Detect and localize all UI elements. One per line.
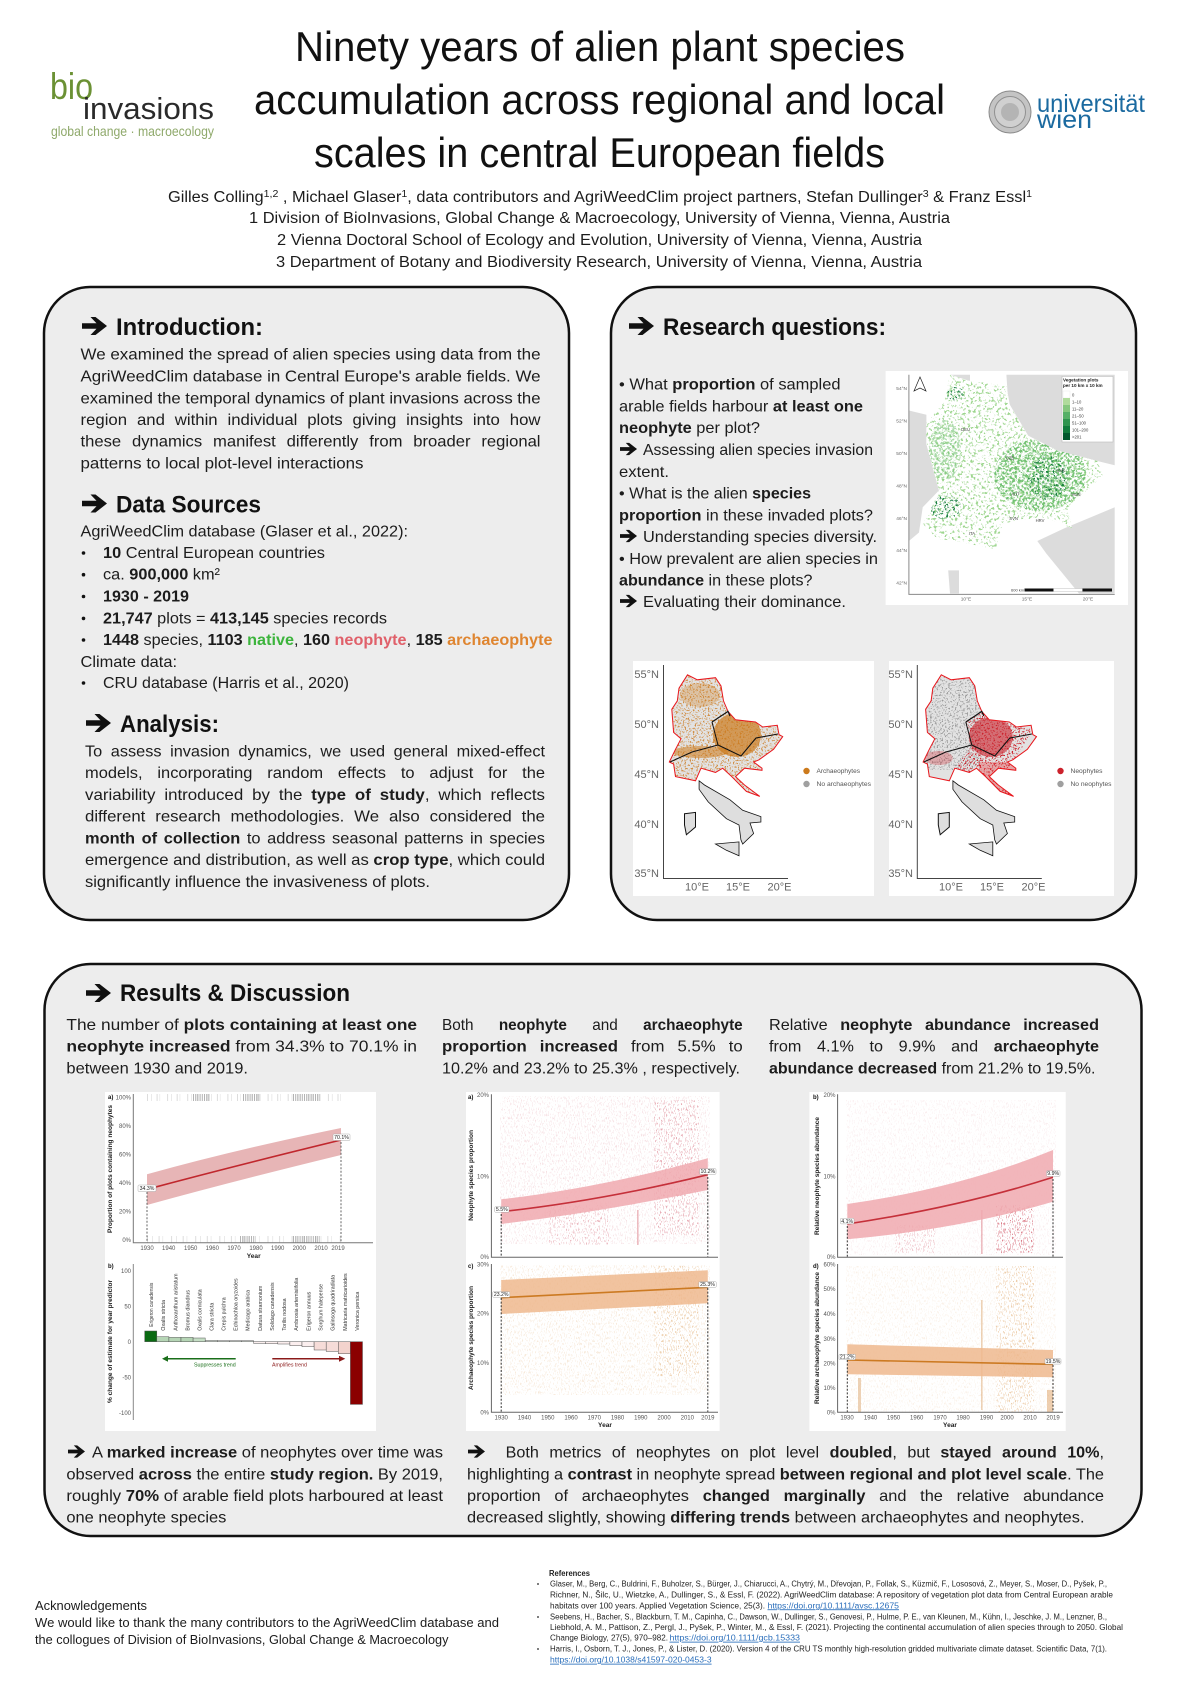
text: data sources list: 1448 species, 1103 native, 160 neophyte, 185 archaeophyte	[103, 632, 553, 649]
chart: proportion of plots containing neophytes and species effect: 50	[124, 1304, 132, 1310]
species names: Oxalis stricta	[161, 1299, 167, 1331]
logo: universitat wien: wien	[1036, 106, 1092, 134]
chart: relative neophyte and archaeophyte abundance: 1990	[980, 1416, 994, 1422]
authors and affiliations: 3 Department of Botany and Biodiversity Research, University of Vienna, Vienna, Austria	[276, 254, 922, 271]
text: analysis body: To assess invasion dynamics, we used general mixed-effect	[85, 743, 546, 760]
map legend: 51–100	[1072, 420, 1087, 426]
legend: archaeophytes: Archaeophytes	[816, 768, 860, 775]
species names: Veronica persica	[355, 1291, 361, 1331]
chart: proportion of plots containing neophytes and species effect: 1990	[271, 1246, 285, 1252]
chart: proportion of plots containing neophytes and species effect: b)	[108, 1264, 114, 1270]
chart: neophyte and archaeophyte species proportion: 10.2%	[700, 1169, 716, 1175]
chart: neophyte and archaeophyte species proportion: 23.2%	[494, 1292, 509, 1298]
chart: relative neophyte and archaeophyte abundance: 2010	[1023, 1416, 1037, 1422]
text: research questions list	[619, 377, 878, 611]
legend: archaeophytes: No archaeophytes	[816, 781, 871, 788]
scatter a	[500, 1096, 710, 1245]
chart: neophyte and archaeophyte species proportion: Neophyte species proportion	[468, 1130, 475, 1221]
chart: neophyte and archaeophyte species proportion: c)	[468, 1264, 473, 1270]
authors and affiliations: , data contributors and AgriWeedClim project partners, Stefan Dullinger	[407, 189, 923, 206]
map: archaeophytes: 55°N	[634, 669, 659, 681]
chart: neophyte and archaeophyte species proportion: 1950	[541, 1416, 555, 1422]
text: research questions list: • How prevalent are alien species in	[619, 551, 878, 568]
species names: Oxalis corniculata	[197, 1289, 203, 1331]
text: analysis body	[85, 743, 546, 891]
chart: relative neophyte and archaeophyte abundance: 10%	[823, 1174, 836, 1180]
map: neophytes	[888, 661, 1114, 896]
map: neophytes: 40°N	[888, 819, 913, 831]
map: neophytes: 15°E	[980, 882, 1004, 894]
legend: neophytes: No neophytes	[1070, 781, 1112, 788]
logo: bioinvasions: invasions	[83, 91, 214, 126]
authors and affiliations: 1	[1026, 189, 1032, 200]
text: discussion of plot level metrics: decreased slightly, showing differing trends between archaeophytes and neophytes.	[467, 1510, 1084, 1527]
map legend: 21–50	[1072, 414, 1084, 418]
chart: neophyte and archaeophyte species proportion: 20%	[477, 1312, 490, 1318]
text: analysis body: month of collection to address seasonal patterns in species	[85, 830, 545, 848]
authors and affiliations: 1,2	[264, 189, 279, 200]
chart: relative neophyte and archaeophyte abundance: 40%	[823, 1312, 836, 1318]
text: analysis body: variability introduced by the type of study , which reflects	[85, 787, 545, 804]
map: vegetation plots per grid cell: 54°N	[896, 386, 908, 392]
confidence band	[147, 1128, 341, 1205]
acknowledgements: We would like to thank the many contributors to the AgriWeedClim database and	[35, 1615, 499, 1630]
chart: relative neophyte and archaeophyte abundance: 0%	[827, 1255, 836, 1261]
map: neophytes: 35°N	[888, 868, 913, 880]
title: scales in central European fields	[314, 129, 885, 176]
references: References	[549, 1568, 590, 1578]
chart: proportion of plots containing neophytes and species effect: 40%	[119, 1181, 132, 1187]
text: data sources list: Climate data:	[80, 654, 177, 671]
chart: proportion of plots containing neophytes and species effect: Proportion of plots containing neophytes	[107, 1105, 114, 1233]
chart: relative neophyte and archaeophyte abundance: Relative archaeophyte species abundance	[814, 1272, 821, 1404]
chart: relative neophyte and archaeophyte abundance: 1940	[864, 1416, 878, 1422]
chart: proportion of plots containing neophytes and species effect: % change of estimate for year predictor	[107, 1280, 114, 1403]
map legend: >201	[1072, 434, 1082, 440]
chart: relative neophyte and archaeophyte abundance: 4.1%	[841, 1219, 853, 1225]
map: vegetation plots per grid cell: SVK	[1057, 468, 1065, 473]
text: research questions list: • What is the alien species	[619, 486, 811, 503]
chart: proportion of plots containing neophytes and species effect: 100%	[116, 1096, 132, 1102]
map: vegetation plots per grid cell: HUN	[1071, 492, 1081, 497]
chart: proportion of plots containing neophytes and species effect: 1940	[162, 1246, 176, 1252]
chart: proportion of plots containing neophytes and species effect: 1970	[227, 1246, 241, 1252]
text: introduction body: patterns to local plot-level interactions	[80, 456, 364, 472]
chart: neophyte and archaeophyte species proportion: 1970	[588, 1416, 602, 1422]
heading: analysis: Analysis:	[120, 711, 219, 738]
map legend: 0	[1072, 392, 1075, 398]
chart: proportion of plots containing neophytes and species effect: -50	[122, 1376, 132, 1382]
authors and affiliations: , Michael Glaser	[278, 189, 401, 206]
text: data sources list: ca. 900,000 km²	[103, 567, 221, 584]
map: neophytes: 10°E	[939, 882, 963, 894]
map: archaeophytes: 35°N	[634, 868, 659, 880]
chart: neophyte and archaeophyte species proportion: 1980	[611, 1416, 625, 1422]
map: neophytes: 50°N	[888, 719, 913, 731]
heading: results and discussion: Results & Discussion	[120, 980, 350, 1007]
references: Harris, I., Osborn, T. J., Jones, P., & Lister, D. (2020). Version 4 of the CRU TS monthly high-resolution gridded multivariate climate dataset. Scientific Data, 7(1).	[550, 1644, 1107, 1654]
legend: archaeophytes	[803, 768, 871, 788]
chart: relative neophyte and archaeophyte abundance: 20%	[823, 1093, 836, 1099]
title	[254, 23, 945, 176]
authors and affiliations: 3	[923, 189, 929, 200]
map legend: 101–200	[1072, 428, 1089, 432]
map legend	[1062, 376, 1113, 442]
logo: universitat wien: universität	[1037, 90, 1145, 118]
text: finding 1: The number of plots containing at least one	[66, 1017, 417, 1034]
chart: relative neophyte and archaeophyte abundance: 9.9%	[1047, 1171, 1059, 1177]
map legend: 11–20	[1072, 406, 1084, 412]
map: vegetation plots per grid cell: 10°E	[961, 596, 971, 602]
species names: Clara stricta	[210, 1302, 216, 1331]
chart: relative neophyte and archaeophyte abundance: 21.2%	[840, 1355, 855, 1361]
acknowledgements	[35, 1598, 499, 1647]
references	[537, 1568, 1123, 1665]
chart: neophyte and archaeophyte species proportion: 2019	[701, 1416, 715, 1422]
text: analysis body: emergence and distribution, as well as crop type, which could	[85, 852, 545, 869]
map: vegetation plots per grid cell: 52°N	[896, 418, 908, 424]
species effect bars	[145, 1331, 362, 1404]
chart: neophyte and archaeophyte species proportion: 10%	[477, 1361, 490, 1367]
species names: Erigeron annuus	[306, 1292, 312, 1331]
chart: neophyte and archaeophyte species proportion: 1990	[634, 1416, 648, 1422]
references: Liebhold, A. M., Pattison, Z., Pergl, J., Pyšek, P., Winter, M., & Essl, F. (2021). Projecting the continental accumulation of alien species through to 2050. Global	[550, 1622, 1123, 1632]
chart: relative neophyte and archaeophyte abundance: 2000	[1000, 1416, 1014, 1422]
species names: Echinochloa oryzoides	[234, 1278, 240, 1331]
authors and affiliations: & Franz Essl	[929, 189, 1026, 206]
chart: proportion of plots containing neophytes and species effect: 20%	[119, 1210, 132, 1216]
chart: neophyte and archaeophyte species proportion: 0%	[480, 1410, 490, 1416]
map: vegetation plots per grid cell: AUT	[1011, 492, 1020, 496]
chart: neophyte and archaeophyte species proportion: 10%	[477, 1174, 490, 1180]
chart: proportion of plots containing neophytes and species effect: 1960	[206, 1246, 220, 1252]
logo: bioinvasions: global change · macroecology	[51, 123, 214, 139]
species names: Crepis pulchra	[221, 1297, 227, 1331]
chart: relative neophyte and archaeophyte abundance: Relative neophyte species abundance	[814, 1117, 821, 1235]
map: archaeophytes: 40°N	[634, 819, 659, 831]
chart: relative neophyte and archaeophyte abundance: d)	[813, 1264, 819, 1270]
chart: neophyte and archaeophyte species proportion: 30%	[477, 1262, 490, 1268]
chart: proportion of plots containing neophytes and species effect: -100	[119, 1411, 132, 1417]
chart: neophyte and archaeophyte species proportion: 2010	[681, 1416, 695, 1422]
map legend: per 10 km x 10 km	[1063, 383, 1103, 388]
chart: neophyte and archaeophyte species proportion	[466, 1092, 720, 1431]
map: vegetation plots per grid cell: 15°E	[1022, 596, 1032, 602]
text: finding 1: between 1930 and 2019.	[66, 1060, 248, 1077]
text: research questions list: extent.	[619, 464, 669, 481]
chart: proportion of plots containing neophytes and species effect: 2000	[293, 1246, 307, 1252]
map: vegetation plots per grid cell: CZE	[1006, 456, 1014, 460]
references: Seebens, H., Bacher, S., Blackburn, T. M., Capinha, C., Dawson, W., Dullinger, S., Genovesi, P., Hulme, P. E., van Kleunen, M., Kühn, I., Jeschke, J. M., Lenzner, B.,	[550, 1611, 1107, 1621]
map: archaeophytes: 45°N	[634, 769, 659, 781]
chart: neophyte and archaeophyte species proportion: 25.3%	[700, 1282, 715, 1288]
chart: proportion of plots containing neophytes and species effect: 0	[128, 1340, 132, 1346]
title: Ninety years of alien plant species	[295, 23, 905, 70]
text: data sources list	[80, 523, 553, 692]
map legend: Vegetation plots	[1063, 378, 1099, 382]
chart: proportion of plots containing neophytes and species effect	[105, 1092, 376, 1431]
text: introduction body: AgriWeedClim database in Central Europe's arable fields. We	[80, 368, 541, 386]
chart: relative neophyte and archaeophyte abundance: 30%	[823, 1337, 836, 1343]
authors and affiliations	[168, 189, 1032, 271]
references: Richner, N., Šilc, U., Wietzke, A., Dullinger, S., & Essl, F. (2022). AgriWeedClim database: A repository of vegetation plot data from Central European arable	[550, 1590, 1113, 1600]
text: research questions list: arable fields harbour at least one	[619, 398, 863, 415]
map: archaeophytes: 50°N	[634, 719, 659, 731]
arrow: suppresses trend	[162, 1356, 236, 1368]
chart: relative neophyte and archaeophyte abundance: 0%	[827, 1410, 836, 1416]
species names: Medicago arabica	[246, 1289, 252, 1331]
north arrow	[914, 377, 926, 391]
legend: neophytes	[1057, 768, 1112, 788]
text: research questions list: proportion in these invaded plots?	[619, 507, 873, 524]
references: https://doi.org/10.1111/gcb.15333	[670, 1633, 800, 1643]
authors and affiliations: 2 Vienna Doctoral School of Ecology and Evolution, University of Vienna, Vienna, Austria	[277, 232, 922, 249]
arrow: amplifies trend	[272, 1356, 345, 1368]
scale bar: 600 km	[1011, 588, 1025, 592]
text: analysis body: significantly influence the invasiveness of plots.	[85, 874, 430, 891]
scale bar	[1011, 588, 1112, 592]
text: finding 1	[66, 1017, 417, 1077]
map: vegetation plots per grid cell: 44°N	[896, 548, 908, 554]
text: finding 2: proportion increased from 5.5% to	[442, 1039, 743, 1056]
map: vegetation plots per grid cell: 50°N	[896, 451, 908, 457]
heading: research questions: Research questions:	[663, 314, 886, 341]
map: archaeophytes: 15°E	[726, 882, 750, 894]
chart: neophyte and archaeophyte species proportion: a)	[468, 1095, 473, 1101]
chart: proportion of plots containing neophytes and species effect: 1980	[249, 1246, 263, 1252]
species names: Datura stramonium	[258, 1286, 264, 1331]
map: vegetation plots per grid cell: 20°E	[1083, 596, 1093, 602]
trend line	[147, 1140, 341, 1189]
text: finding 2	[442, 1017, 743, 1077]
value labels: 70.1%	[334, 1135, 349, 1141]
value labels: 34.3%	[140, 1186, 155, 1192]
chart: proportion of plots containing neophytes and species effect: 80%	[119, 1124, 132, 1130]
chart: neophyte and archaeophyte species proportion: 20%	[477, 1093, 490, 1099]
text: discussion of plot level metrics: highlighting a contrast in neophyte spread between regional and plot level scale . The	[467, 1466, 1104, 1483]
authors and affiliations: 1 Division of BioInvasions, Global Change & Macroecology, University of Vienna, Vienna, Austria	[249, 210, 950, 227]
text: finding 2: Both neophyte and archaeophyte	[442, 1017, 743, 1034]
scatter c	[500, 1265, 710, 1395]
authors and affiliations: 1	[401, 189, 408, 200]
map: vegetation plots per grid cell: 48°N	[896, 484, 908, 490]
map: vegetation plots per grid cell: HRV	[1036, 518, 1045, 523]
text: finding 3	[769, 1017, 1099, 1077]
text: discussion of neophyte increase: A marked increase of neophytes over time was	[92, 1444, 443, 1461]
scatter b	[846, 1100, 1056, 1255]
chart: proportion of plots containing neophytes and species effect: 2010	[314, 1246, 328, 1252]
map: archaeophytes: 20°E	[768, 882, 791, 894]
arrow: amplifies trend: Amplifies trend	[272, 1362, 307, 1368]
text: finding 2: 10.2% and 23.2% to 25.3% , respectively.	[442, 1060, 740, 1077]
chart: proportion of plots containing neophytes and species effect: 2019	[331, 1246, 345, 1252]
chart: proportion of plots containing neophytes and species effect: a)	[108, 1095, 113, 1101]
text: finding 3: abundance decreased from 21.2% to 19.5%.	[769, 1060, 1096, 1077]
text: research questions list: abundance in these plots?	[619, 572, 813, 590]
panel: introduction, data sources, analysis	[44, 287, 569, 920]
title: accumulation across regional and local	[254, 76, 945, 123]
text: discussion of plot level metrics	[467, 1444, 1104, 1527]
map: neophytes: 45°N	[888, 769, 913, 781]
chart: relative neophyte and archaeophyte abundance: 1960	[910, 1416, 924, 1422]
heading: introduction: Introduction:	[116, 314, 263, 341]
text: data sources list: 10 Central European countries	[103, 545, 325, 562]
logo: universitat wien	[989, 90, 1145, 134]
panel: results and discussion	[44, 964, 1142, 1536]
chart: relative neophyte and archaeophyte abundance: Year	[943, 1422, 957, 1429]
chart: relative neophyte and archaeophyte abundance: 1950	[887, 1416, 901, 1422]
map: vegetation plots per grid cell	[886, 371, 1128, 605]
chart: relative neophyte and archaeophyte abundance: 60%	[823, 1262, 836, 1268]
species names: Anthoxanthum aristatum	[173, 1273, 179, 1331]
text: discussion of neophyte increase: roughly 70% of arable field plots harboured at least	[66, 1488, 444, 1505]
acknowledgements: Acknowledgements	[35, 1598, 147, 1613]
text: introduction body	[80, 346, 541, 472]
scatter d	[846, 1266, 1056, 1412]
species names: Torilis nodosa	[282, 1298, 288, 1331]
chart: relative neophyte and archaeophyte abundance: 19.5%	[1046, 1359, 1061, 1365]
map: vegetation plots per grid cell: ITA	[969, 531, 975, 536]
authors and affiliations: Gilles Colling	[168, 189, 258, 206]
text: research questions list: Assessing alien species invasion	[643, 442, 873, 459]
map: vegetation plots per grid cell: 46°N	[896, 516, 908, 522]
chart: relative neophyte and archaeophyte abundance: 20%	[823, 1362, 836, 1368]
chart: neophyte and archaeophyte species proportion: 5.5%	[496, 1207, 508, 1213]
references: https://doi.org/10.1038/s41597-020-0453-3	[550, 1655, 712, 1665]
chart: neophyte and archaeophyte species proportion: 2000	[657, 1416, 671, 1422]
chart: neophyte and archaeophyte species proportion: 1940	[518, 1416, 532, 1422]
text: discussion of neophyte increase: observed across the entire study region. By 2019,	[66, 1466, 443, 1483]
text: discussion of plot level metrics: Both metrics of neophytes on plot level doubled, but stayed around 10%,	[506, 1444, 1104, 1461]
chart: relative neophyte and archaeophyte abundance: 50%	[823, 1287, 836, 1293]
chart: neophyte and archaeophyte species proportion: 0%	[480, 1255, 490, 1261]
map legend: 1–10	[1072, 400, 1082, 404]
chart: relative neophyte and archaeophyte abundance: 2019	[1046, 1416, 1060, 1422]
text: data sources list: 21,747 plots = 413,145 species records	[103, 610, 387, 627]
map: archaeophytes	[633, 661, 874, 896]
text: discussion of neophyte increase: one neophyte species	[66, 1510, 226, 1527]
species names: Bromus diandrus	[185, 1290, 191, 1331]
map: neophytes: 20°E	[1022, 882, 1045, 894]
text: analysis body: models, incorporating random effects to adjust for the	[85, 765, 545, 782]
logo: bioinvasions: bio	[50, 66, 93, 107]
chart: neophyte and archaeophyte species proportion: Archaeophyte species proportion	[468, 1286, 475, 1390]
value labels	[138, 1134, 350, 1192]
text: research questions list: • What proportion of sampled	[619, 377, 840, 394]
chart: proportion of plots containing neophytes and species effect: 1950	[184, 1246, 198, 1252]
map: vegetation plots per grid cell: DEU	[961, 427, 970, 432]
references: https://doi.org/10.1111/avsc.12675	[768, 1600, 899, 1610]
chart: relative neophyte and archaeophyte abundance: b)	[813, 1095, 819, 1101]
species names: Erigeron canadensis	[149, 1283, 155, 1327]
logo: bioinvasions	[50, 66, 214, 139]
species names: Sorghum halepense	[319, 1284, 325, 1331]
text: data sources list: CRU database (Harris et al., 2020)	[103, 675, 349, 692]
acknowledgements: the collogues of Division of BioInvasions, Global Change & Macroecology	[35, 1632, 449, 1647]
text: finding 3: from 4.1% to 9.9% and archaeophyte	[769, 1039, 1099, 1056]
text: analysis body: different research methodologies. We also considered the	[85, 809, 545, 826]
chart: neophyte and archaeophyte species proportion: Year	[598, 1422, 612, 1429]
map: neophytes: 55°N	[888, 669, 913, 681]
legend: neophytes: Neophytes	[1070, 768, 1102, 775]
text: data sources list: 1930 - 2019	[103, 588, 189, 606]
chart: relative neophyte and archaeophyte abundance: 10%	[823, 1386, 836, 1392]
heading: data sources: Data Sources	[116, 492, 261, 518]
text: data sources list: AgriWeedClim database (Glaser et al., 2022):	[80, 523, 408, 540]
chart: proportion of plots containing neophytes and species effect: 0%	[122, 1238, 132, 1244]
text: introduction body: examined the temporal dynamics of plant invasions across the	[80, 390, 541, 408]
species names	[149, 1273, 361, 1331]
species names: Solidago canadensis	[270, 1282, 276, 1331]
references: habitats over 100 years. Applied Vegetation Science, 25(3).	[550, 1600, 765, 1610]
text: discussion of neophyte increase	[66, 1444, 444, 1527]
chart: proportion of plots containing neophytes and species effect: Year	[247, 1253, 261, 1260]
map: archaeophytes: 10°E	[685, 882, 709, 894]
chart: relative neophyte and archaeophyte abundance: 1930	[840, 1416, 854, 1422]
chart: neophyte and archaeophyte species proportion: 1960	[564, 1416, 578, 1422]
chart: relative neophyte and archaeophyte abundance: 1970	[933, 1416, 947, 1422]
text: introduction body: these dynamics manifest differently from broader regional	[80, 434, 540, 450]
references: Glaser, M., Berg, C., Buldrini, F., Buholzer, S., Bürger, J., Chiarucci, A., Chytrý, M., Dřevojan, P., Follak, S., Küzmič, F., Lososová, Z., Meyer, S., Moser, D., Pyšek, P.,	[550, 1579, 1107, 1589]
text: finding 1: neophyte increased from 34.3% to 70.1% in	[66, 1039, 417, 1056]
chart: proportion of plots containing neophytes and species effect: 60%	[119, 1152, 132, 1158]
chart: neophyte and archaeophyte species proportion: 1930	[495, 1416, 509, 1422]
text: finding 3: Relative neophyte abundance increased	[769, 1017, 1099, 1034]
arrow: suppresses trend: Suppresses trend	[194, 1362, 236, 1368]
chart: proportion of plots containing neophytes and species effect: 100	[121, 1269, 132, 1275]
chart: proportion of plots containing neophytes and species effect: 1930	[140, 1246, 154, 1252]
text: research questions list: Evaluating their dominance.	[643, 594, 846, 611]
text: research questions list: Understanding species diversity.	[643, 529, 877, 546]
species names: Galinsoga quadriradiata	[331, 1274, 337, 1331]
chart: relative neophyte and archaeophyte abundance	[809, 1092, 1066, 1431]
text: introduction body: We examined the spread of alien species using data from the	[80, 346, 541, 364]
text: discussion of plot level metrics: proportion of archaeophytes changed marginally and the relative abundance	[467, 1488, 1104, 1505]
species names: Matricaria matricarioides	[343, 1273, 349, 1331]
species names: Ambrosia artemisiifolia	[294, 1277, 300, 1331]
text: research questions list: neophyte per plot?	[619, 420, 760, 437]
map: vegetation plots per grid cell: 42°N	[896, 580, 908, 586]
references: Change Biology, 27(5), 970–982.	[550, 1633, 668, 1643]
text: introduction body: region and within individual plots giving insights into how	[80, 412, 541, 429]
chart: relative neophyte and archaeophyte abundance: 1980	[956, 1416, 970, 1422]
panel: research questions	[611, 287, 1136, 920]
rug marks	[147, 1098, 341, 1240]
map: vegetation plots per grid cell: SVN	[1009, 516, 1018, 521]
